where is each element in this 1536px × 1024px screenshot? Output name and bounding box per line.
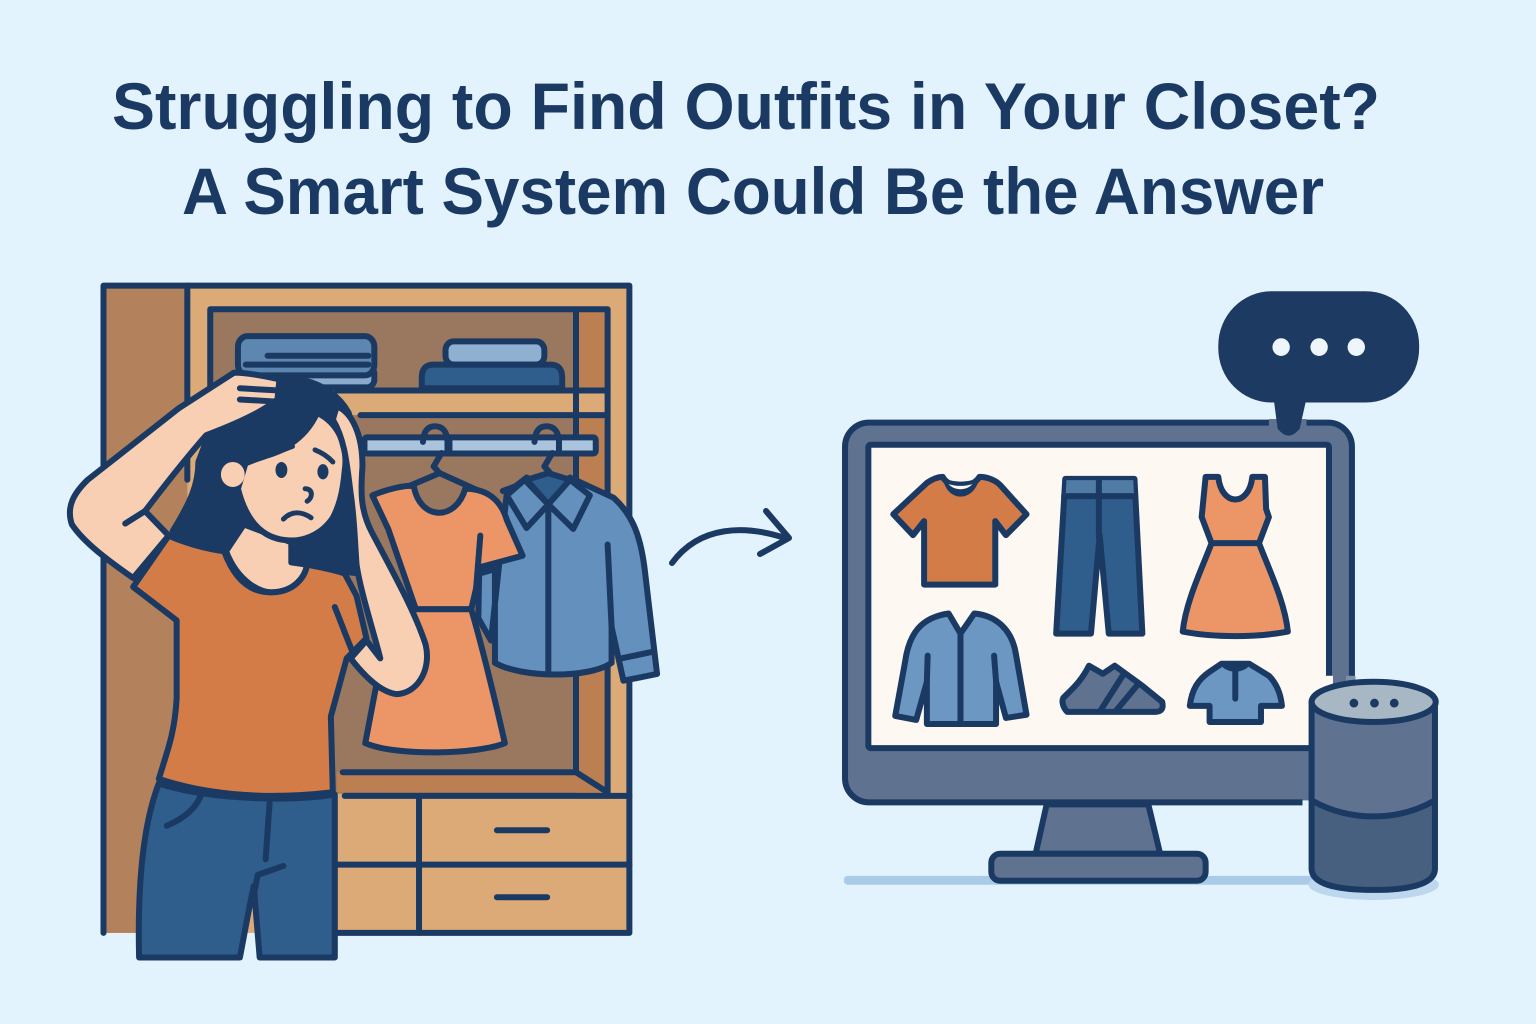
face — [238, 413, 345, 540]
clothes rod — [364, 426, 596, 453]
smart speaker — [1312, 682, 1436, 890]
arrow — [672, 511, 789, 563]
trouser details — [167, 797, 283, 895]
ear — [221, 462, 245, 487]
title — [112, 69, 1380, 228]
fringe — [234, 402, 337, 466]
trousers — [139, 783, 335, 957]
hanging orange dress — [365, 453, 523, 752]
polo shirt icon — [1190, 664, 1282, 722]
sneaker icon — [1063, 666, 1163, 712]
raised left arm — [70, 373, 279, 578]
floor shadow — [844, 869, 1439, 900]
jeans icon — [1056, 479, 1142, 634]
right arm — [333, 406, 427, 694]
hanging blue shirt — [478, 453, 657, 681]
t-shirt icon — [893, 477, 1027, 585]
folded clothes on shelf — [238, 336, 562, 388]
monitor — [845, 423, 1355, 806]
orange t-shirt — [133, 536, 366, 796]
woman — [70, 373, 427, 957]
neck — [226, 524, 307, 592]
dress icon — [1183, 477, 1288, 636]
smart system: monitor and speaker — [844, 291, 1439, 900]
illustration: stressed woman at wardrobe — [70, 286, 657, 957]
wardrobe — [103, 286, 629, 933]
hair — [173, 378, 359, 574]
eyes, brows, nose, mouth — [270, 446, 333, 519]
title: A Smart System Could Be the Answer — [182, 154, 1324, 228]
jacket icon — [895, 613, 1027, 724]
speech bubble — [1218, 291, 1419, 436]
monitor stand — [991, 804, 1206, 881]
title: Struggling to Find Outfits in Your Closet? — [112, 69, 1380, 143]
